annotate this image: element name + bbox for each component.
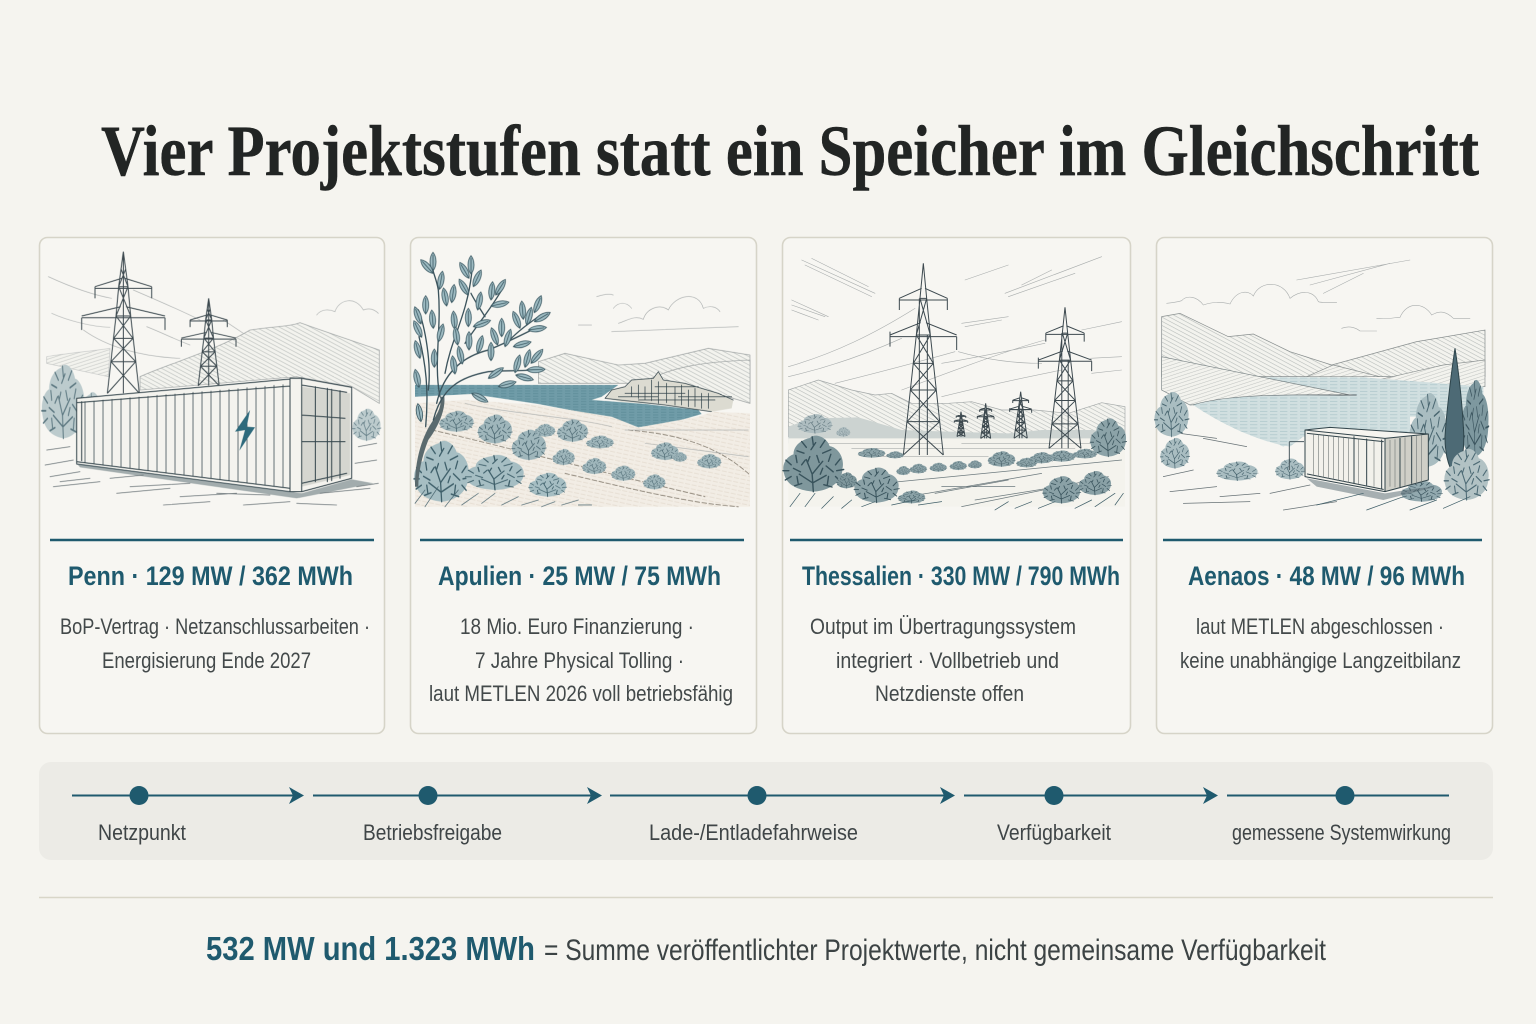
rule [50,539,374,541]
panel: process timeline [39,762,1493,860]
step: gemessene Systemwirkung: gemessene Systemwirkung [1232,820,1451,845]
heading: Apulien · 25 MW / 75 MWh [438,561,721,591]
body text: laut METLEN abgeschlossen · [1196,614,1444,639]
heading: Thessalien · 330 MW / 790 MWh [802,561,1120,591]
heading: Aenaos · 48 MW / 96 MWh [1188,561,1465,591]
summary statement [206,930,1327,967]
body text: 7 Jahre Physical Tolling · [475,648,684,673]
rule [790,539,1123,541]
body text: keine unabhängige Langzeitbilanz [1180,648,1461,673]
body text [429,614,733,706]
panel: Penn [40,238,384,734]
step: Betriebsfreigabe [313,786,602,845]
body text: 18 Mio. Euro Finanzierung · [460,614,694,639]
step: Lade-/Entladefahrweise [610,786,955,845]
step: Verfügbarkeit [964,786,1218,845]
body text [810,614,1076,706]
step: Netzpunkt: Netzpunkt [98,820,186,845]
illustration: battery container with pylons and hills [42,252,381,505]
step: Lade-/Entladefahrweise: Lade-/Entladefahrweise [649,820,858,845]
body text: Output im Übertragungssystem [810,614,1076,639]
body text [1180,614,1461,673]
panel: Thessalien [782,238,1130,734]
body text: BoP-Vertrag · Netzanschlussarbeiten · [60,614,370,639]
panel: Aenaos [1154,238,1492,734]
illustration: small storage unit by a lake [1154,260,1489,510]
illustration: olive tree, bay and town [411,252,750,507]
body text [60,614,370,673]
body text: Energisierung Ende 2027 [102,648,311,673]
heading: Penn · 129 MW / 362 MWh [68,561,353,591]
rule [1163,539,1482,541]
step: Verfügbarkeit: Verfügbarkeit [997,820,1111,845]
body text: integriert · Vollbetrieb und [836,648,1059,673]
summary statement: 532 MW und 1.323 MWh [206,930,535,967]
rule [420,539,744,541]
panel: Apulien [410,238,756,734]
summary statement: = Summe veröffentlichter Projektwerte, nicht gemeinsame Verfügbarkeit [544,934,1327,967]
step: Betriebsfreigabe: Betriebsfreigabe [363,820,502,845]
body text: laut METLEN 2026 voll betriebsfähig [429,681,733,706]
illustration: transmission towers in a plain [783,257,1127,510]
body text: Netzdienste offen [875,681,1024,706]
step: gemessene Systemwirkung [1227,786,1451,845]
step: Netzpunkt [72,786,304,845]
